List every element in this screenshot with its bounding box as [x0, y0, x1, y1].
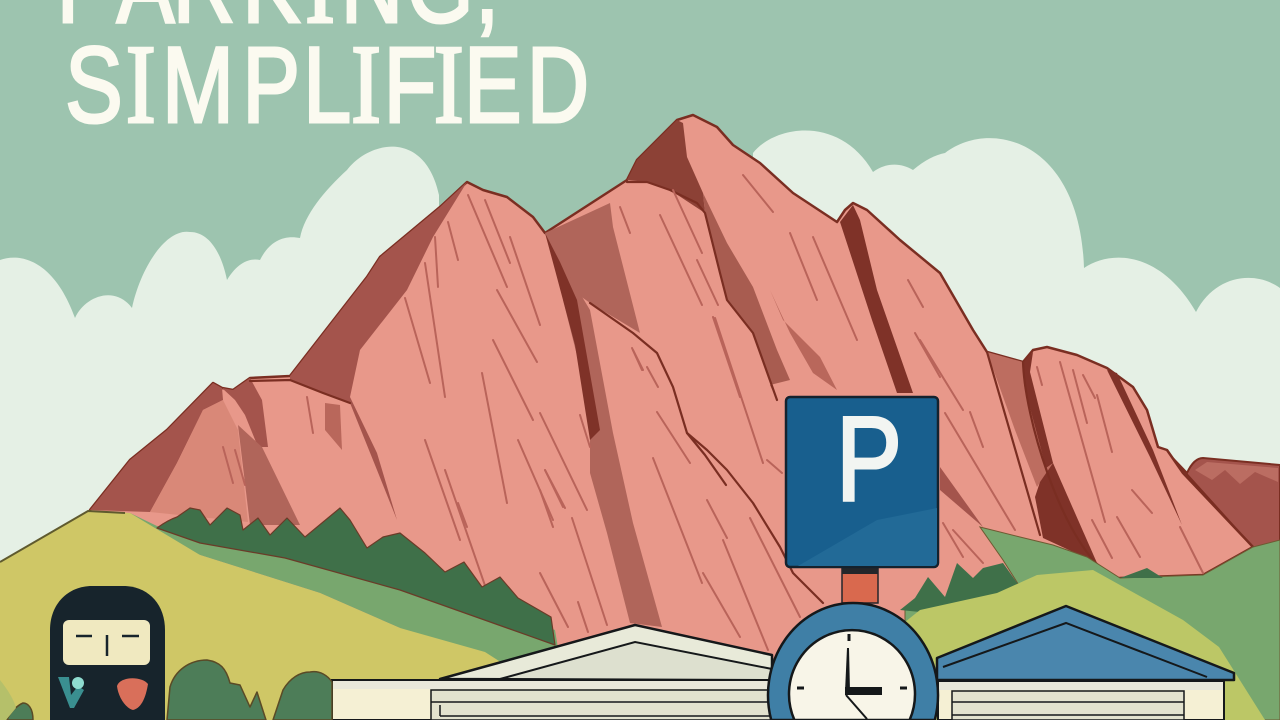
red rock mountain	[90, 115, 1253, 700]
title: I	[126, 23, 156, 146]
left forest	[157, 508, 555, 645]
garage roof inner	[500, 642, 772, 680]
low left lower shade	[238, 425, 300, 525]
right mid band	[987, 352, 1053, 487]
title: S	[65, 24, 123, 145]
teal dot	[72, 677, 84, 689]
hill outline	[0, 511, 125, 562]
clock face	[789, 630, 915, 720]
right dark line	[1023, 352, 1053, 468]
parking sign	[786, 392, 938, 603]
clock ring	[768, 603, 938, 720]
right forest	[900, 563, 1020, 612]
title: D	[527, 24, 589, 145]
title: E	[464, 24, 522, 145]
clock	[768, 603, 938, 720]
clouds	[0, 131, 1280, 600]
left garage building	[332, 625, 772, 720]
right garage building	[937, 606, 1234, 720]
low left dark strip	[222, 378, 268, 447]
rock outlines	[250, 182, 1100, 603]
left smudge	[325, 403, 342, 450]
far right mountain	[1165, 450, 1280, 552]
far right mountain highlights	[1195, 462, 1278, 484]
garage fascia	[333, 681, 771, 689]
sign post	[842, 557, 878, 603]
central channel dark strip	[545, 233, 600, 440]
peak shadow	[627, 120, 705, 213]
lighter hill patch	[0, 680, 16, 720]
title: P	[242, 24, 300, 145]
letter P: P	[836, 392, 902, 526]
right garage wall	[938, 681, 1224, 720]
device body	[50, 586, 165, 720]
blue roof inner line	[943, 623, 1207, 677]
sign board	[786, 397, 938, 567]
garage roof	[440, 625, 772, 680]
title	[57, 0, 589, 146]
bushes	[7, 660, 332, 720]
teal button	[58, 677, 84, 708]
crack lines	[223, 175, 1203, 650]
low left mid face	[150, 400, 248, 522]
peak smear	[770, 290, 837, 390]
low left rock shading	[90, 383, 223, 512]
left yellow hill	[0, 511, 560, 720]
red button	[117, 678, 148, 710]
right dark base	[1035, 463, 1097, 563]
small lower strip	[940, 467, 983, 527]
clock hands	[845, 648, 882, 719]
right green hill	[905, 527, 1280, 720]
title: I	[434, 23, 464, 146]
right dark strip	[840, 205, 913, 393]
upper central shade	[545, 203, 640, 333]
right yellow hill	[905, 570, 1265, 720]
right narrow strip	[1107, 370, 1182, 525]
title: I	[351, 23, 381, 146]
foot forest	[1120, 568, 1163, 578]
sign highlight	[798, 508, 937, 566]
device screen	[63, 620, 150, 665]
blue roof	[937, 606, 1234, 680]
title: L	[303, 24, 351, 145]
garage door	[431, 690, 772, 720]
right garage door	[952, 691, 1184, 720]
peak channel	[703, 193, 790, 400]
left green band	[95, 512, 560, 690]
garage wall	[332, 680, 772, 720]
screen marks	[76, 635, 139, 656]
central channel	[545, 233, 662, 627]
clock ticks	[797, 634, 907, 688]
mountain silhouette	[90, 115, 1253, 700]
right garage fascia	[939, 682, 1223, 690]
parking meter device	[50, 586, 165, 720]
title: F	[384, 24, 436, 145]
title: M	[162, 24, 234, 145]
main left shadow	[290, 182, 467, 520]
